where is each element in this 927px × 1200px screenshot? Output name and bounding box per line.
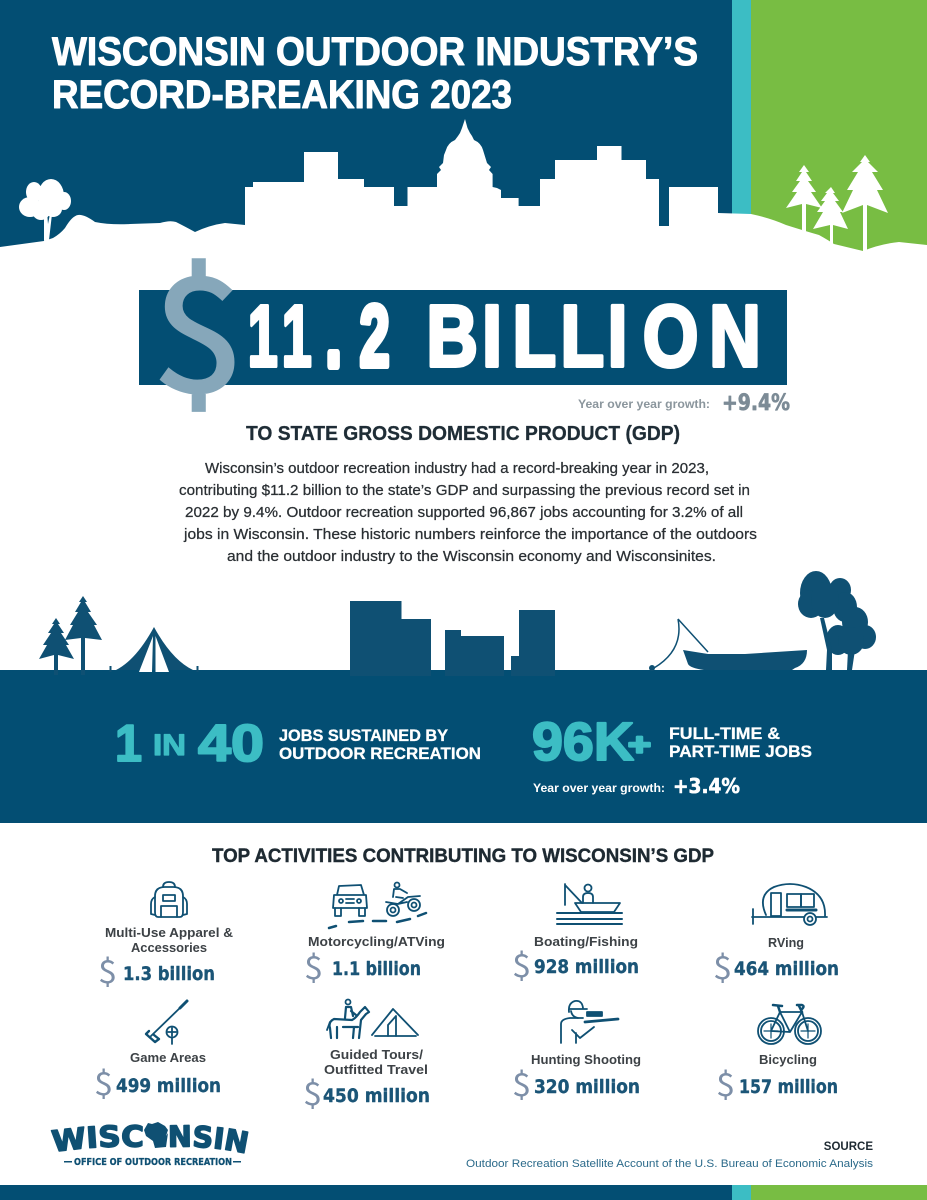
logo: Wisconsin Office of Outdoor Recreation: NSIN xyxy=(170,1124,248,1154)
source: SOURCE xyxy=(824,1141,873,1153)
logo: Wisconsin Office of Outdoor Recreation: WISC xyxy=(50,1124,143,1152)
dollar sign: $ xyxy=(713,943,732,989)
dollar sign: $ xyxy=(512,941,531,987)
year over year growth jobs: +3.4% xyxy=(673,774,740,798)
logo: Wisconsin Office of Outdoor Recreation xyxy=(50,1122,248,1168)
label: RVing xyxy=(768,936,804,950)
activity: boating and fishing xyxy=(512,884,639,987)
heading: top activities: TOP ACTIVITIES CONTRIBUTING TO WISCONSIN’S GDP xyxy=(212,846,714,867)
intro paragraph: Wisconsin’s outdoor recreation industry had a record-breaking year in 2023, xyxy=(205,461,709,477)
year over year growth GDP xyxy=(578,391,790,416)
subheading GDP: TO STATE GROSS DOMESTIC PRODUCT (GDP) xyxy=(246,423,680,445)
source xyxy=(466,1141,874,1170)
stat: 1 in 40: 40 xyxy=(198,715,264,773)
intro paragraph: jobs in Wisconsin. These historic numbers reinforce the importance of the outdoors xyxy=(183,527,757,543)
title xyxy=(52,30,698,117)
dollar sign: $ xyxy=(512,1060,531,1106)
activity: bicycling xyxy=(716,1005,838,1106)
value: 320 million xyxy=(534,1076,640,1098)
icon: boat with fishing rod xyxy=(649,619,807,671)
value: 499 million xyxy=(116,1075,221,1097)
icon: backpack xyxy=(151,882,187,917)
dollar sign: $ xyxy=(94,1059,113,1105)
icon: pine trees right xyxy=(786,155,888,251)
icon: camper trailer xyxy=(752,884,827,925)
activity: game areas xyxy=(94,1001,221,1105)
activity: multi-use apparel xyxy=(98,882,233,993)
label: Boating/Fishing xyxy=(534,935,638,949)
year over year growth jobs xyxy=(533,774,740,798)
icon: trees right on band xyxy=(798,571,876,670)
logo: Wisconsin Office of Outdoor Recreation: OFFICE OF OUTDOOR RECREATION xyxy=(74,1157,232,1168)
value: 157 million xyxy=(739,1076,838,1098)
dollar sign: $ xyxy=(303,1069,322,1115)
label: Motorcycling/ATVing xyxy=(308,935,445,949)
stat: 1 in 40: IN xyxy=(153,729,186,762)
activity: motorcycling xyxy=(304,882,445,989)
stats band xyxy=(0,670,927,823)
value: 928 million xyxy=(534,956,639,978)
source: Outdoor Recreation Satellite Account of the U.S. Bureau of Economic Analysis xyxy=(466,1158,874,1170)
dollar sign: $ xyxy=(716,1060,735,1106)
stat label: jobs sustained: OUTDOOR RECREATION xyxy=(279,744,481,763)
title: RECORD-BREAKING 2023 xyxy=(52,73,512,117)
icon: bicycle xyxy=(758,1005,821,1044)
stat label: full-time and part-time jobs: PART-TIME JOBS xyxy=(669,742,812,761)
label: Guided Tours/ xyxy=(330,1048,424,1062)
icon: state of Wisconsin xyxy=(144,1122,168,1148)
intro paragraph: contributing $11.2 billion to the state’s GDP and surpassing the previous record set in xyxy=(179,483,750,499)
icon: tree left xyxy=(19,179,71,241)
year over year growth GDP: +9.4% xyxy=(722,391,790,416)
big number banner xyxy=(139,287,787,385)
stat label: full-time and part-time jobs: FULL-TIME & xyxy=(669,724,780,743)
icon: pine trees on band xyxy=(39,596,102,675)
big number banner: 11.2 xyxy=(248,288,390,385)
intro paragraph xyxy=(179,461,757,565)
title: WISCONSIN OUTDOOR INDUSTRY’S xyxy=(52,30,698,74)
header background panel xyxy=(0,0,927,260)
label: Multi-Use Apparel & xyxy=(105,926,233,940)
big dollar sign: $ xyxy=(152,210,244,437)
intro paragraph: 2022 by 9.4%. Outdoor recreation supported 96,867 jobs accounting for 3.2% of all xyxy=(185,505,743,521)
skyline and hills silhouette xyxy=(0,119,927,670)
dollar sign: $ xyxy=(304,943,323,989)
dollar sign: $ xyxy=(98,947,117,993)
label: Hunting Shooting xyxy=(531,1053,641,1067)
value: 1.3 billion xyxy=(123,963,215,985)
stat: 96K+: + xyxy=(628,727,651,762)
label: Accessories xyxy=(131,941,207,955)
icon: jeep and ATV xyxy=(329,882,426,928)
icon: hunter with rifle xyxy=(561,1001,618,1043)
icon: fishing boat xyxy=(557,884,622,924)
stat: 1 in 40 xyxy=(115,715,264,773)
label xyxy=(324,1048,428,1077)
activity: guided tours xyxy=(303,1000,430,1115)
stat label: full-time and part-time jobs xyxy=(669,724,812,761)
stat: 96K+: 96K xyxy=(532,712,634,772)
buildings silhouette xyxy=(350,601,555,676)
icon: tent xyxy=(110,627,198,672)
big number banner: BILLION xyxy=(426,287,761,385)
stat label: jobs sustained: JOBS SUSTAINED BY xyxy=(279,726,449,745)
activity: hunting and shooting xyxy=(512,1001,641,1106)
label: Bicycling xyxy=(759,1053,817,1067)
label: Game Areas xyxy=(130,1051,206,1065)
activity: RVing xyxy=(713,884,839,989)
label xyxy=(105,926,233,955)
footer colour bar xyxy=(0,1185,927,1200)
icon: horse rider and tent xyxy=(327,1000,418,1038)
year over year growth GDP: Year over year growth: xyxy=(578,397,710,411)
value: 1.1 billion xyxy=(332,958,421,980)
stat label: jobs sustained xyxy=(279,726,481,763)
value: 450 million xyxy=(323,1085,430,1107)
value: 464 million xyxy=(734,958,839,980)
icon: golf club and ball xyxy=(146,1001,187,1044)
stat: 1 in 40: 1 xyxy=(115,715,142,773)
year over year growth jobs: Year over year growth: xyxy=(533,781,665,795)
label: Outfitted Travel xyxy=(324,1063,428,1077)
intro paragraph: and the outdoor industry to the Wisconsin economy and Wisconsinites. xyxy=(227,549,716,565)
